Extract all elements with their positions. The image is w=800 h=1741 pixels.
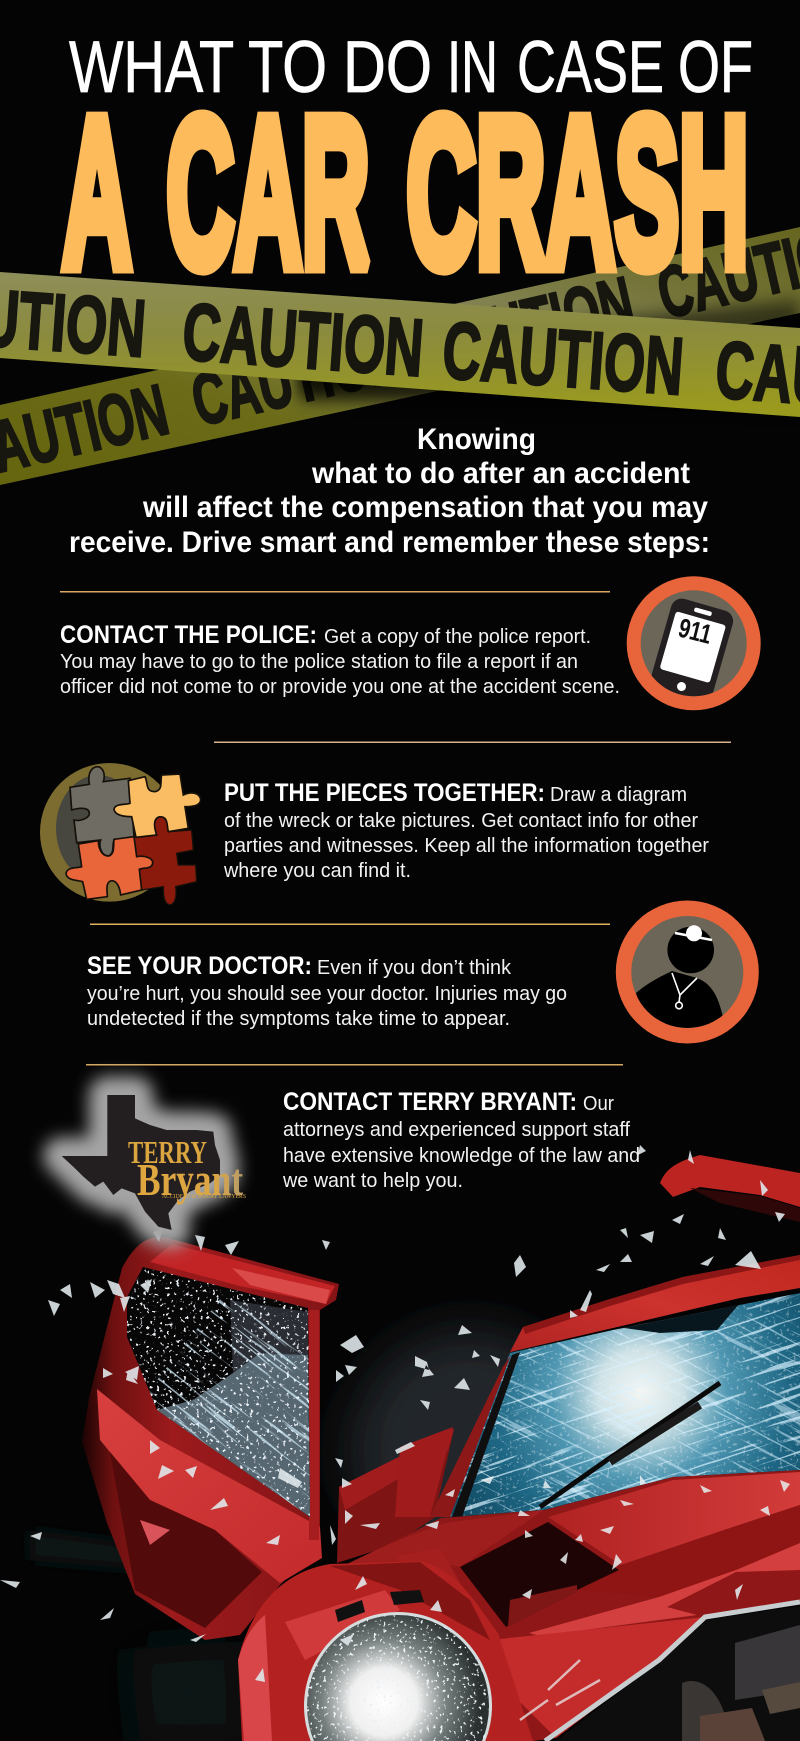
title line: what to do in case of: OF <box>678 27 753 108</box>
hood <box>300 1470 800 1741</box>
windshield sparkle on hood <box>445 1475 790 1570</box>
title line: what to do in case of: WHAT TO <box>69 27 327 108</box>
intro text: will affect the compensation that you may <box>142 491 708 524</box>
step 2 text: put the pieces together: where you can find it. <box>223 859 411 882</box>
step 2 text: put the pieces together <box>223 779 709 882</box>
title line: a car crash: A <box>62 74 132 310</box>
headlight <box>300 1610 496 1741</box>
logo glow <box>62 1095 220 1230</box>
step 1 text: contact the police: Get a copy of the police report. <box>324 625 591 648</box>
logo wordmark <box>128 1134 246 1205</box>
red fender between door and windshield <box>337 1427 454 1563</box>
left car door <box>82 1237 339 1640</box>
dark road backdrop <box>30 1330 590 1741</box>
intro text: receive. Drive smart and remember these steps: <box>69 526 710 559</box>
windshield <box>450 1293 800 1517</box>
headlight fender <box>238 1561 533 1741</box>
step 2 text: put the pieces together: parties and witnesses. Keep all the information together <box>224 834 709 857</box>
red panel top right <box>660 1155 800 1222</box>
icon: doctor <box>616 900 759 1044</box>
intro text: what to do after an accident <box>311 457 690 490</box>
title line: what to do in case of: IN <box>447 27 498 108</box>
title line: what to do in case of <box>69 27 753 108</box>
title line: a car crash: CAR <box>166 74 370 310</box>
step 4 text: contact terry bryant: have extensive knowledge of the law and <box>283 1144 640 1167</box>
title <box>62 27 753 310</box>
texas outline <box>62 1095 220 1230</box>
step 4 text: contact terry bryant: CONTACT TERRY BRYANT: <box>283 1088 577 1116</box>
terry bryant logo <box>62 1095 246 1230</box>
back caution tape: CAUTION <box>417 262 641 388</box>
door window glass <box>127 1267 310 1517</box>
logo wordmark: TERRY <box>128 1134 207 1170</box>
front caution tape: CAUTION <box>180 287 426 394</box>
step 1 text: contact the police: You may have to go to the police station to file a report if an <box>60 650 578 673</box>
logo wordmark: Bryant <box>137 1154 244 1205</box>
crumple dark cavity <box>460 1522 619 1627</box>
icon: 911 phone: 911 <box>676 613 715 650</box>
step 2 text: put the pieces together: PUT THE PIECES TOGETHER: <box>224 779 545 807</box>
step 3 text: see your doctor <box>87 952 567 1030</box>
intro text: Knowing <box>417 423 536 456</box>
title line: what to do in case of: DO <box>343 27 432 108</box>
roof and a-pillar <box>430 1255 800 1517</box>
intro text <box>69 423 710 559</box>
chrome torn edge <box>545 1602 800 1741</box>
step 4 text: contact terry bryant: we want to help you. <box>282 1169 463 1192</box>
step 1 text: contact the police: CONTACT THE POLICE: <box>60 621 317 649</box>
icon: puzzle pieces <box>40 763 201 905</box>
back caution tape: CAUTION <box>185 316 408 442</box>
back caution tape <box>0 209 800 495</box>
engine bay <box>556 1606 800 1741</box>
icon: 911 phone <box>627 576 761 710</box>
step 4 text: contact terry bryant: Our <box>583 1092 614 1115</box>
car crash scene <box>0 1145 800 1741</box>
step 3 text: see your doctor: SEE YOUR DOCTOR: <box>87 952 312 980</box>
step 2 text: put the pieces together: of the wreck or take pictures. Get contact info for other <box>224 809 698 832</box>
step 4 text: contact terry bryant <box>282 1088 640 1192</box>
logo wordmark: ACCIDENT & INJURY LAWYERS <box>162 1194 246 1200</box>
step 3 text: see your doctor: Even if you don’t think <box>317 956 512 979</box>
step 3 text: see your doctor: undetected if the symptoms take time to appear. <box>87 1007 510 1030</box>
step 3 text: see your doctor: you’re hurt, you should see your doctor. Injuries may go <box>87 982 567 1005</box>
title line: a car crash <box>62 74 748 310</box>
step 1 text: contact the police <box>60 621 620 698</box>
step 2 text: put the pieces together: Draw a diagram <box>550 783 687 806</box>
step 4 text: contact terry bryant: attorneys and experienced support staff <box>283 1118 630 1141</box>
title line: what to do in case of: CASE <box>517 27 664 108</box>
fender scratches <box>520 1660 600 1720</box>
flying glass shards <box>0 1145 785 1682</box>
front caution tape <box>0 272 800 423</box>
step 1 text: contact the police: officer did not come to or provide you one at the accident scene. <box>60 675 620 698</box>
